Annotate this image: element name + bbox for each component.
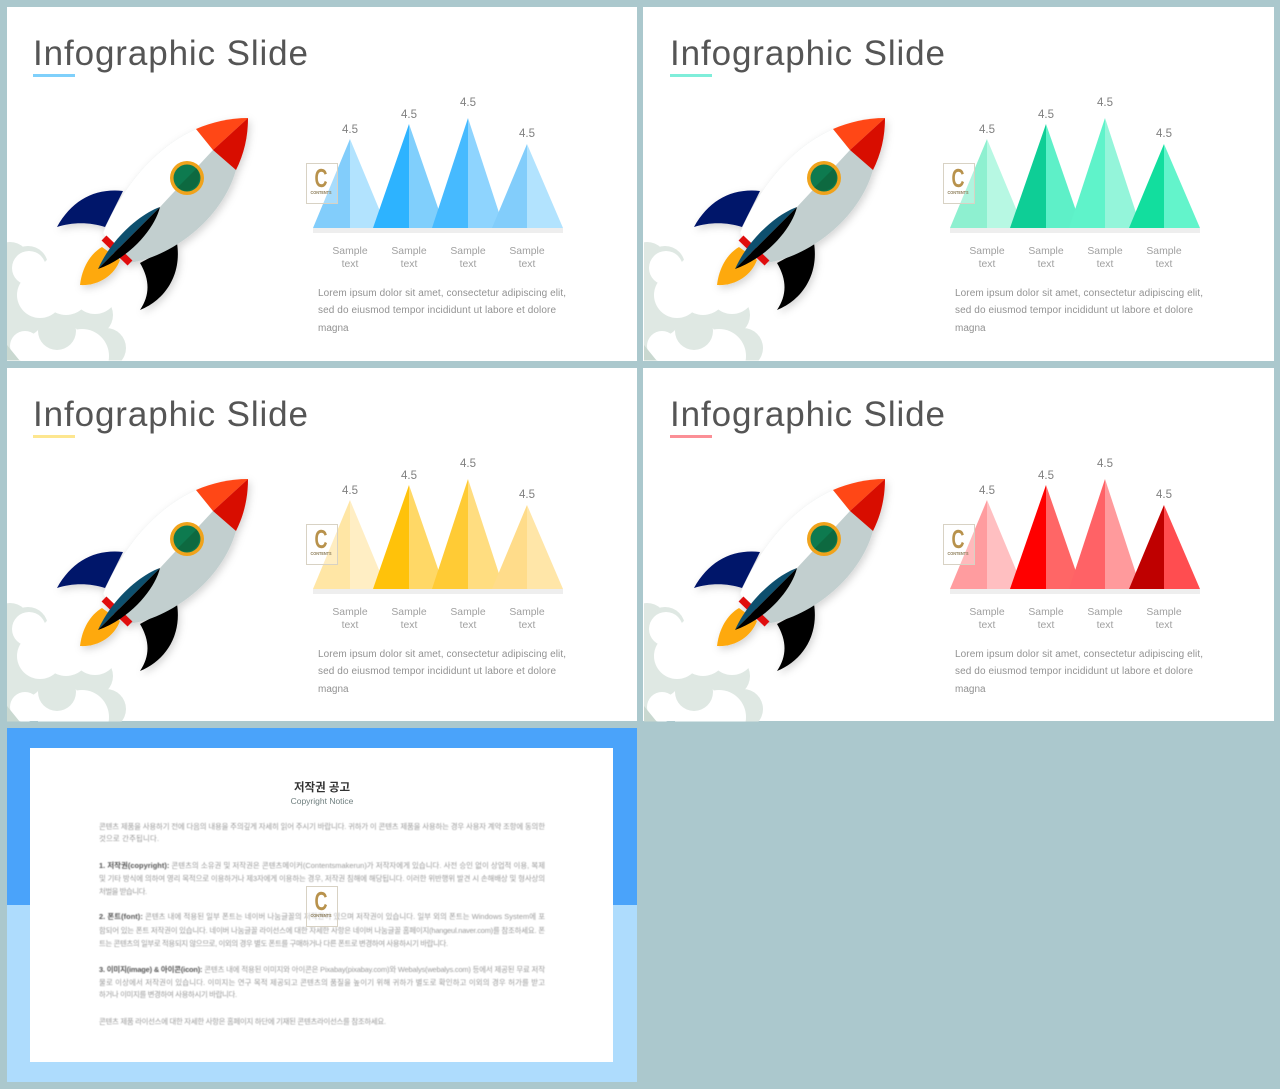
category labels: Sample [1087, 607, 1123, 618]
title: Infographic Slide [670, 34, 945, 73]
watermark: CONTENTS [310, 190, 332, 195]
panel: green slide [627, 7, 1274, 383]
body text: magna [955, 684, 986, 695]
category labels: Sample [332, 246, 368, 257]
category labels: text [460, 259, 476, 270]
title underline [33, 435, 75, 438]
watermark: CONTENTS [948, 551, 968, 556]
category labels: text [979, 259, 995, 270]
body text: sed do eiusmod tempor incididunt ut labore et dolore [318, 666, 556, 677]
title: Infographic Slide [33, 395, 308, 434]
watermark: CONTENTS [310, 551, 332, 556]
body text: Lorem ipsum dolor sit amet, consectetur adipiscing elit, [318, 288, 566, 299]
watermark [944, 163, 974, 204]
panel: red slide [627, 368, 1274, 744]
triangle chart: 4.5 [519, 489, 535, 501]
body text: Lorem ipsum dolor sit amet, consectetur adipiscing elit, [318, 649, 566, 660]
triangle chart: 4.5 [401, 470, 417, 482]
category labels [332, 246, 545, 270]
category labels: text [1038, 620, 1054, 631]
triangle chart: 4.5 [1097, 97, 1113, 109]
category labels: text [1097, 620, 1113, 631]
body text: magna [318, 323, 349, 334]
notice body text: 것으로 간주됩니다. [99, 834, 159, 843]
notice body text: 함되어 있는 폰트 저작권이 있습니다. 네이버 나눔글꼴 라이선스에 대한 자세한 사항은 네이버 나눔글꼴 홈페이지(hangeul.naver.com)를 참조하세요. 폰 [99, 926, 545, 935]
subheading: Copyright Notice [291, 796, 354, 806]
icon: rocket [694, 479, 885, 671]
watermark [944, 524, 974, 564]
category labels: text [519, 620, 535, 631]
watermark: C [952, 524, 965, 554]
watermark: C [314, 163, 328, 193]
category labels: Sample [509, 607, 545, 618]
category labels: Sample [509, 246, 545, 257]
triangle chart: 4.5 [1156, 128, 1172, 140]
notice body text [99, 822, 545, 1026]
category labels: Sample [1146, 607, 1182, 618]
triangle chart: 4.5 [519, 128, 535, 140]
notice body text: 물로 이상에서 저작권이 있습니다. 이미지는 연구 목적 제공되고 콘텐츠의 품질을 높이기 위해 귀하가 별도로 확인하고 이외의 경우 허가를 받고 [99, 978, 545, 987]
watermark: C [314, 524, 328, 554]
body text: magna [318, 684, 349, 695]
notice body text: 트는 콘텐츠의 일부로 적용되지 않으므로, 이외의 경우 별도 폰트를 구매하거나 다른 폰트로 변경하여 사용하시기 바랍니다. [99, 939, 448, 948]
watermark: C [314, 886, 328, 916]
icon: rocket [57, 118, 248, 310]
triangle chart: 4.5 [460, 97, 476, 109]
category labels: text [342, 259, 358, 270]
icon: rocket [694, 118, 885, 310]
panel: yellow slide [0, 368, 637, 744]
category labels: Sample [450, 607, 486, 618]
category labels: Sample [391, 246, 427, 257]
body text: sed do eiusmod tempor incididunt ut labore et dolore [955, 305, 1193, 316]
icon: smoke cloud [0, 242, 126, 383]
body text: Lorem ipsum dolor sit amet, consectetur adipiscing elit, [955, 288, 1203, 299]
icon: smoke cloud [627, 242, 763, 383]
watermark [306, 163, 338, 204]
category labels: Sample [332, 607, 368, 618]
category labels: text [1156, 620, 1172, 631]
triangle chart: 4.5 [979, 124, 995, 136]
category labels [969, 607, 1182, 631]
category labels: text [1156, 259, 1172, 270]
notice body text: 콘텐츠 제품을 사용하기 전에 다음의 내용을 주의깊게 자세히 읽어 주시기 바랍니다. 귀하가 이 콘텐츠 제품을 사용하는 경우 사용자 계약 조항에 동의한 [99, 822, 545, 831]
category labels: text [401, 259, 417, 270]
title: Infographic Slide [670, 395, 945, 434]
category labels: text [401, 620, 417, 631]
title underline [670, 435, 712, 438]
triangle chart: 4.5 [401, 109, 417, 121]
body text: magna [955, 323, 986, 334]
triangle chart: 4.5 [342, 485, 358, 497]
notice body text: 및 기타 방식에 의하여 영리 목적으로 이용하거나 제3자에게 이용하는 경우, 저작권 침해에 해당됩니다. 이러한 위반행위 발견 시 손해배상 및 형사상의 [99, 874, 545, 883]
body text: Lorem ipsum dolor sit amet, consectetur adipiscing elit, [955, 649, 1203, 660]
triangle chart: 4.5 [979, 485, 995, 497]
triangle chart: 4.5 [1038, 109, 1054, 121]
watermark [306, 886, 338, 926]
notice body text: 1. 저작권(copyright): 콘텐츠의 소유권 및 저작권은 콘텐츠메이커(Contentsmakerun)가 저작자에게 있습니다. 사전 승인 없이 상업적 이용, 복제 [99, 861, 545, 870]
category labels: text [1097, 259, 1113, 270]
triangle chart: 4.5 [460, 458, 476, 470]
body text [955, 288, 1203, 334]
triangle chart: 4.5 [1097, 458, 1113, 470]
panel: copyright notice [7, 728, 637, 1082]
watermark: C [952, 163, 965, 193]
category labels: text [1038, 259, 1054, 270]
watermark [306, 524, 338, 564]
triangle chart [950, 97, 1200, 233]
body text [318, 649, 566, 695]
panel: blue slide [0, 7, 637, 383]
icon: smoke cloud [627, 603, 763, 744]
notice body text: 3. 이미지(image) & 아이콘(icon): 콘텐츠 내에 적용된 이미지와 아이콘은 Pixabay(pixabay.com)와 Webalys(webalys.com) 등에서 제공된 무료 저작 [99, 965, 545, 974]
title underline [670, 74, 712, 77]
notice body text: 하거나 이미지를 변경하여 사용하시기 바랍니다. [99, 990, 237, 999]
category labels: text [979, 620, 995, 631]
watermark: CONTENTS [948, 190, 968, 195]
triangle chart [313, 97, 563, 233]
body text [318, 288, 566, 334]
category labels: Sample [969, 246, 1005, 257]
title underline [33, 74, 75, 77]
watermark: CONTENTS [310, 913, 332, 918]
triangle chart [313, 458, 563, 594]
category labels: text [342, 620, 358, 631]
body text: sed do eiusmod tempor incididunt ut labore et dolore [955, 666, 1193, 677]
category labels: text [519, 259, 535, 270]
notice body text: 콘텐츠 제품 라이선스에 대한 자세한 사항은 홈페이지 하단에 기재된 콘텐츠라이선스를 참조하세요. [99, 1017, 386, 1026]
title: Infographic Slide [33, 34, 308, 73]
category labels: Sample [391, 607, 427, 618]
triangle chart: 4.5 [342, 124, 358, 136]
triangle chart [950, 458, 1200, 594]
category labels: text [460, 620, 476, 631]
triangle chart: 4.5 [1038, 470, 1054, 482]
category labels [969, 246, 1182, 270]
category labels: Sample [1028, 246, 1064, 257]
notice body text: 2. 폰트(font): 콘텐츠 내에 적용된 일부 폰트는 네이버 나눔글꼴의 저작권이 있으며 저작권이 있습니다. 일부 외의 폰트는 Windows System에 포 [99, 912, 545, 921]
heading: 저작권 공고 [294, 780, 350, 794]
category labels: Sample [969, 607, 1005, 618]
category labels [332, 607, 545, 631]
triangle chart: 4.5 [1156, 489, 1172, 501]
category labels: Sample [1028, 607, 1064, 618]
category labels: Sample [1087, 246, 1123, 257]
category labels: Sample [450, 246, 486, 257]
notice body text: 처벌을 받습니다. [99, 887, 147, 896]
icon: rocket [57, 479, 248, 671]
icon: smoke cloud [0, 603, 126, 744]
body text [955, 649, 1203, 695]
category labels: Sample [1146, 246, 1182, 257]
body text: sed do eiusmod tempor incididunt ut labore et dolore [318, 305, 556, 316]
